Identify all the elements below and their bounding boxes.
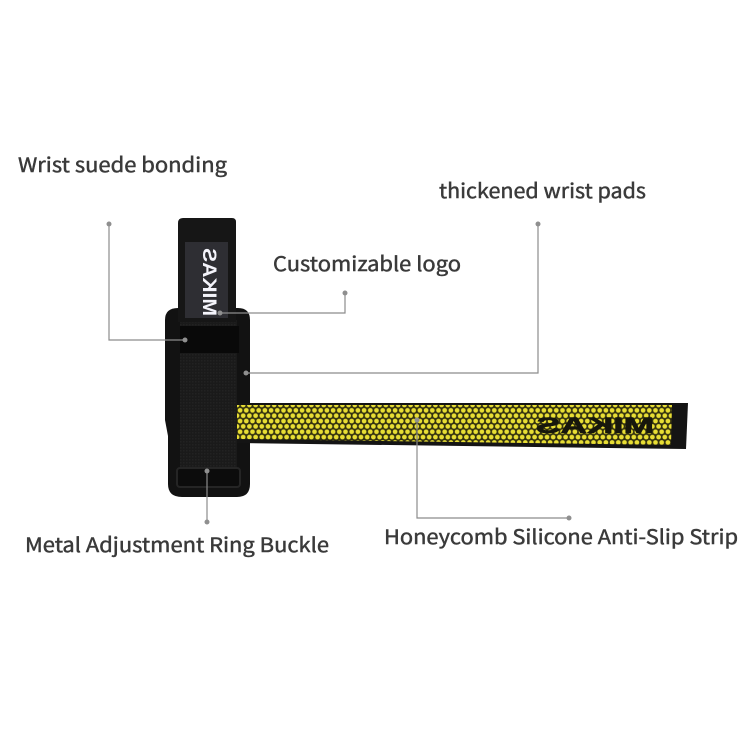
woven strap <box>180 320 237 468</box>
yellow honeycomb strip <box>237 403 688 449</box>
callout: honeycomb strip <box>384 418 738 550</box>
callout: customizable logo: Customizable logo <box>273 248 461 277</box>
callout: thickened wrist pads: thickened wrist pads <box>439 175 646 204</box>
callout: wrist suede bonding: Wrist suede bonding <box>18 149 227 178</box>
callout: customizable logo <box>218 248 461 316</box>
top wrist strap with logo <box>178 218 236 322</box>
metal ring buckle <box>177 468 240 487</box>
callout: wrist suede bonding <box>18 149 227 342</box>
callout: metal adjustment ring buckle <box>25 468 329 558</box>
strip logo: MIKAS <box>536 413 654 438</box>
callout: metal adjustment ring buckle: Metal Adjustment Ring Buckle <box>25 529 329 558</box>
wrist pad <box>165 308 250 497</box>
logo patch: MIKAS <box>198 248 219 316</box>
callout: honeycomb strip: Honeycomb Silicone Anti-Slip Strip <box>384 521 738 550</box>
suede bonding patch <box>180 326 239 353</box>
callout: thickened wrist pads <box>244 175 646 376</box>
